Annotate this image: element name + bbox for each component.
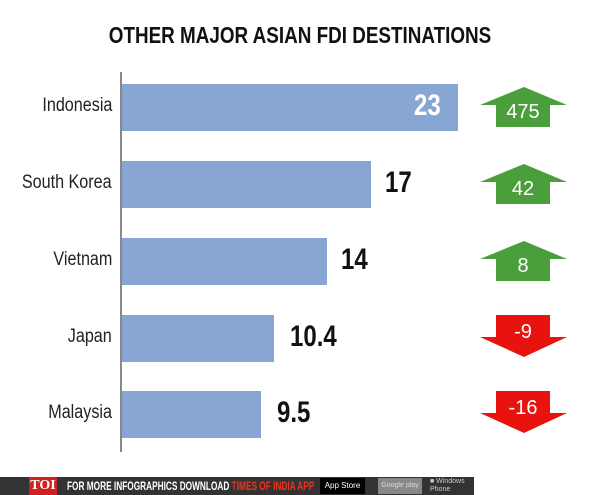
text: 9.5 [277, 396, 310, 429]
store badges [320, 478, 365, 494]
bar Malaysia [122, 391, 261, 438]
arrow down -16: -16 [509, 397, 537, 419]
label Japan: Japan [68, 326, 112, 347]
arrow down -16 [480, 391, 567, 433]
arrow up 42: 42 [512, 178, 534, 200]
footer text: FOR MORE INFOGRAPHICS DOWNLOAD TIMES OF INDIA APP [67, 479, 314, 493]
TOI logo: TOI [30, 478, 56, 493]
bar Indonesia: 23 [414, 89, 441, 122]
label Indonesia: Indonesia [42, 95, 112, 116]
text: 17 [385, 166, 412, 199]
axis [120, 72, 122, 452]
footer banner: ■ Windows Phone [430, 478, 465, 493]
arrow up 475: 475 [506, 101, 540, 123]
bar Japan [122, 315, 274, 362]
text: 14 [341, 243, 368, 276]
label Malaysia: Malaysia [48, 402, 112, 423]
store badges: App Store [325, 481, 360, 490]
bar South Korea [122, 161, 371, 208]
arrow up 475 [480, 87, 567, 127]
bar Indonesia [122, 84, 458, 131]
bar Vietnam [122, 238, 327, 285]
arrow down -9: -9 [514, 321, 532, 343]
label South Korea: South Korea [22, 172, 112, 193]
footer banner: Google play [381, 482, 419, 489]
title: OTHER MAJOR ASIAN FDI DESTINATIONS [109, 22, 491, 48]
text: 10.4 [290, 320, 337, 353]
arrow up 42 [480, 164, 567, 204]
arrow down -9 [480, 315, 567, 357]
label Vietnam: Vietnam [53, 249, 112, 270]
arrow up 8: 8 [517, 255, 529, 277]
footer banner [0, 477, 474, 495]
arrow up 8 [480, 241, 567, 281]
